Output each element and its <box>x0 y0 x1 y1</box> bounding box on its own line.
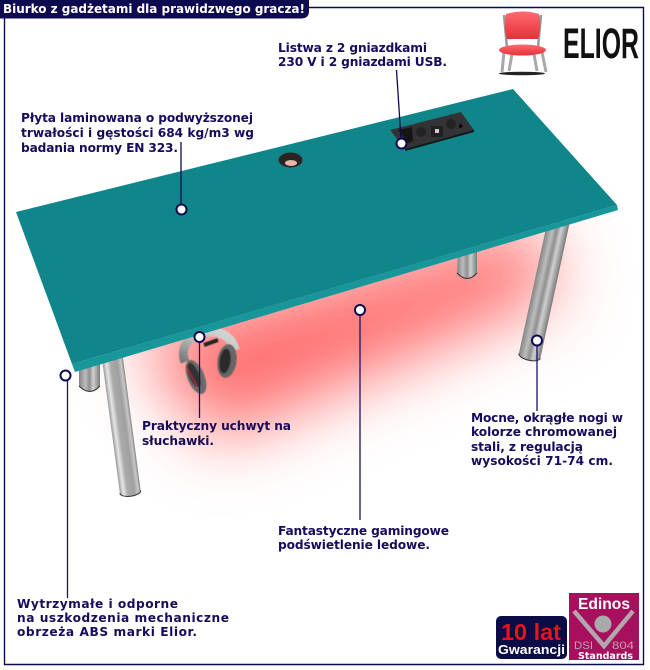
callout: top panel: trwałości i gęstości 684 kg/m3 wg <box>21 126 254 140</box>
callout: power strip: Listwa z 2 gniazdkami <box>278 41 427 55</box>
back legs <box>79 250 477 392</box>
badge: 10 year warranty <box>496 616 567 659</box>
callout: top panel: badania normy EN 323. <box>21 141 178 155</box>
callout: legs: Mocne, okrągłe nogi w <box>471 411 623 425</box>
badge: 10 year warranty: Gwarancji <box>498 643 565 657</box>
callout: legs <box>471 336 623 468</box>
cable grommet <box>278 152 302 168</box>
callout: LED lighting <box>278 305 449 552</box>
callout: top panel <box>21 111 254 214</box>
badge: Edinos standards: Edinos <box>578 596 630 613</box>
badge: Edinos standards: Standards <box>578 651 633 662</box>
callout: legs: stali, z regulacją <box>471 440 583 454</box>
front right leg <box>518 218 570 363</box>
callout: headphone holder <box>142 332 291 448</box>
title banner: Biurko z gadżetami dla prawidzwego gracza! <box>3 2 305 16</box>
callout: legs: wysokości 71-74 cm. <box>471 454 613 468</box>
badge: Edinos standards: DSI <box>574 640 593 652</box>
callout: legs: kolorze chromowanej <box>471 425 617 439</box>
badge: Edinos standards <box>569 593 639 662</box>
logo icon: red chair <box>499 12 546 75</box>
badge: 10 year warranty: 10 lat <box>501 619 561 645</box>
front left leg <box>102 354 141 498</box>
callout: headphone holder: słuchawki. <box>142 434 214 448</box>
badge: Edinos standards: 804 <box>612 640 634 652</box>
callout: LED lighting: podświetlenie ledowe. <box>278 538 430 552</box>
headphones <box>181 332 239 397</box>
desk top <box>16 89 618 372</box>
callout: ABS edge: Wytrzymałe i odporne <box>17 597 178 611</box>
callout: ABS edge: na uszkodzenia mechaniczne <box>17 611 229 625</box>
callout: LED lighting: Fantastyczne gamingowe <box>278 524 449 538</box>
power strip <box>390 112 474 151</box>
callout: top panel: Płyta laminowana o podwyższonej <box>21 111 253 125</box>
callout: headphone holder: Praktyczny uchwyt na <box>142 419 291 433</box>
callout: power strip <box>278 41 447 148</box>
callout: power strip: 230 V i 2 gniazdami USB. <box>278 55 447 69</box>
callout: ABS edge: obrzeża ABS marki Elior. <box>17 625 197 639</box>
callout: ABS edge <box>17 370 229 639</box>
LED glow under desk <box>135 225 560 440</box>
